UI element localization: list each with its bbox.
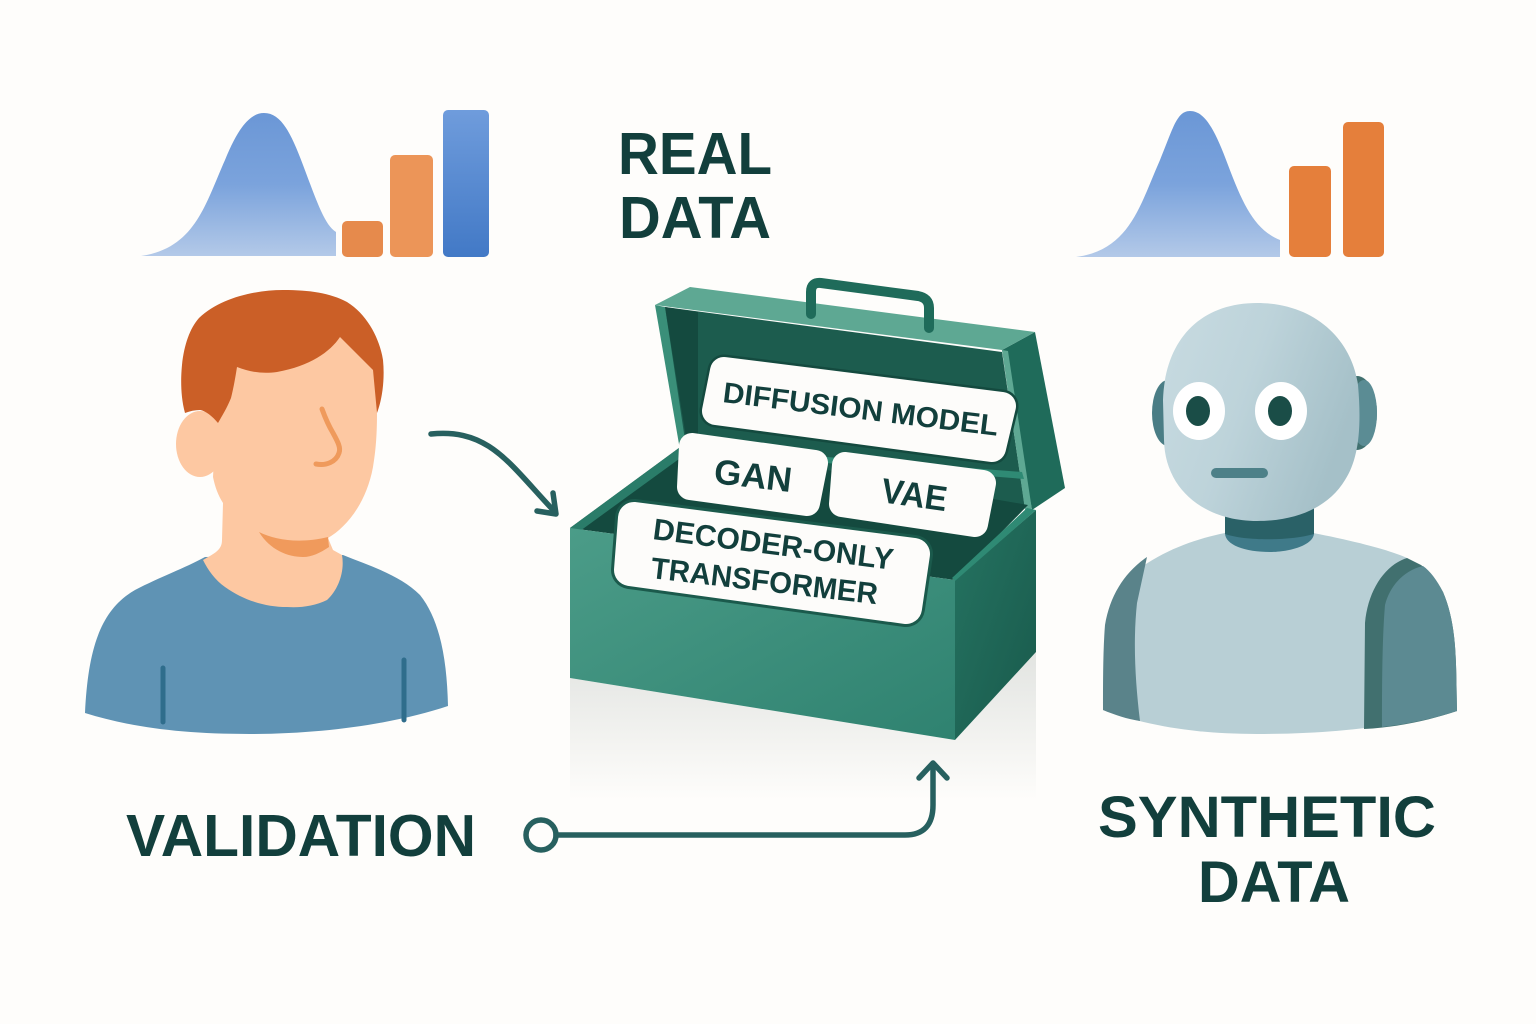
icon: human figure <box>85 290 448 734</box>
arrow: human to toolbox <box>431 433 556 514</box>
box left rim <box>570 445 690 531</box>
robot neck <box>1225 505 1314 552</box>
label: diffusion model: DIFFUSION MODEL <box>721 377 1000 443</box>
left bar medium <box>390 155 433 257</box>
left bar small <box>342 221 383 257</box>
left ear <box>1152 380 1184 446</box>
heading: synthetic data: DATA <box>1198 850 1350 915</box>
right arm light panel <box>1382 566 1457 727</box>
label: vae: VAE <box>879 471 950 519</box>
right ear <box>1337 376 1377 450</box>
left arm <box>1103 557 1147 721</box>
box back rim <box>683 446 1024 479</box>
right bell curve <box>1076 111 1280 257</box>
heading: real data: DATA <box>619 185 771 251</box>
heading: validation: VALIDATION <box>126 803 476 869</box>
robot right eye <box>1255 382 1307 440</box>
robot body <box>1103 533 1457 734</box>
lid interior <box>665 307 1025 508</box>
label: decoder-only transformer: TRANSFORMER <box>649 552 880 611</box>
robot head <box>1163 303 1359 521</box>
left bell curve <box>141 113 336 256</box>
icon: robot figure <box>1103 303 1457 734</box>
left bar tall <box>443 110 489 257</box>
arrow: validation to toolbox <box>526 763 947 850</box>
heading: real data: REAL <box>618 121 772 187</box>
heading: synthetic data: SYNTHETIC <box>1098 785 1436 850</box>
box side <box>955 510 1036 740</box>
ear <box>176 411 224 477</box>
right bar short <box>1289 166 1331 257</box>
label: gan <box>690 446 815 503</box>
right arm dark band <box>1364 558 1457 729</box>
label: gan: GAN <box>712 452 794 500</box>
hair <box>181 290 384 423</box>
handle <box>811 283 929 328</box>
label: decoder-only transformer: DECODER-ONLY <box>651 513 895 577</box>
floor shadow <box>570 652 1036 800</box>
heading: synthetic data <box>1098 785 1436 915</box>
box right rim <box>952 508 1036 581</box>
shirt <box>85 555 448 734</box>
chin shadow <box>259 532 329 557</box>
neck and face <box>203 326 379 607</box>
robot left eye <box>1173 382 1225 440</box>
heading: real data <box>618 121 772 251</box>
lid top face <box>655 287 1035 350</box>
lid right inner strip <box>1002 350 1032 510</box>
chart: right distribution and bars <box>1076 111 1384 257</box>
box front <box>570 528 955 740</box>
right bar tall <box>1343 122 1384 257</box>
chart: left distribution and bars <box>141 110 489 257</box>
lid left edge <box>655 305 690 450</box>
lid right side <box>1002 332 1065 510</box>
toolbox <box>570 283 1065 800</box>
label: decoder-only transformer <box>630 513 914 611</box>
nose <box>316 409 340 465</box>
box interior <box>570 445 1028 580</box>
robot mouth <box>1211 468 1268 478</box>
label: vae <box>842 465 983 524</box>
